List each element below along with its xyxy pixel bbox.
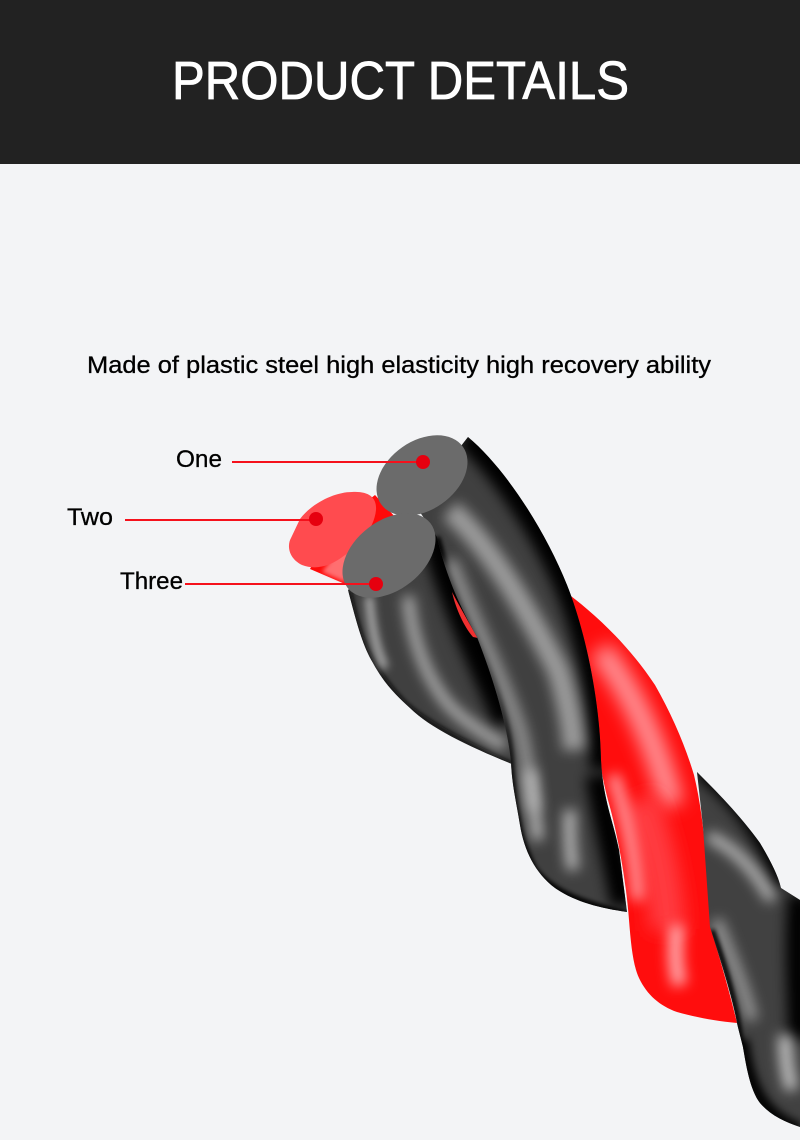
cut face: strand one: [361, 419, 483, 532]
callout: Three: [120, 568, 383, 595]
black strand three: upper segment: [348, 534, 511, 764]
twisted three-strand cord illustration: [289, 419, 800, 1135]
black strand one: [421, 437, 627, 912]
header banner: [0, 0, 800, 164]
cut face: strand three: [326, 496, 452, 615]
subtitle text: Made of plastic steel high elasticity high recovery ability: [87, 352, 711, 379]
title: PRODUCT DETAILS: [172, 51, 629, 111]
callout: One: [176, 446, 430, 473]
black strand three: lower segment: [695, 765, 800, 1135]
red strand: main segment: [571, 596, 737, 1023]
red strand: small gap sliver: [452, 592, 478, 638]
callout: Two: [67, 504, 323, 531]
callout: Two: Two: [67, 504, 113, 531]
callout: Three: Three: [120, 568, 183, 595]
red strand: top end: [289, 492, 396, 584]
callout: One: One: [176, 446, 222, 473]
